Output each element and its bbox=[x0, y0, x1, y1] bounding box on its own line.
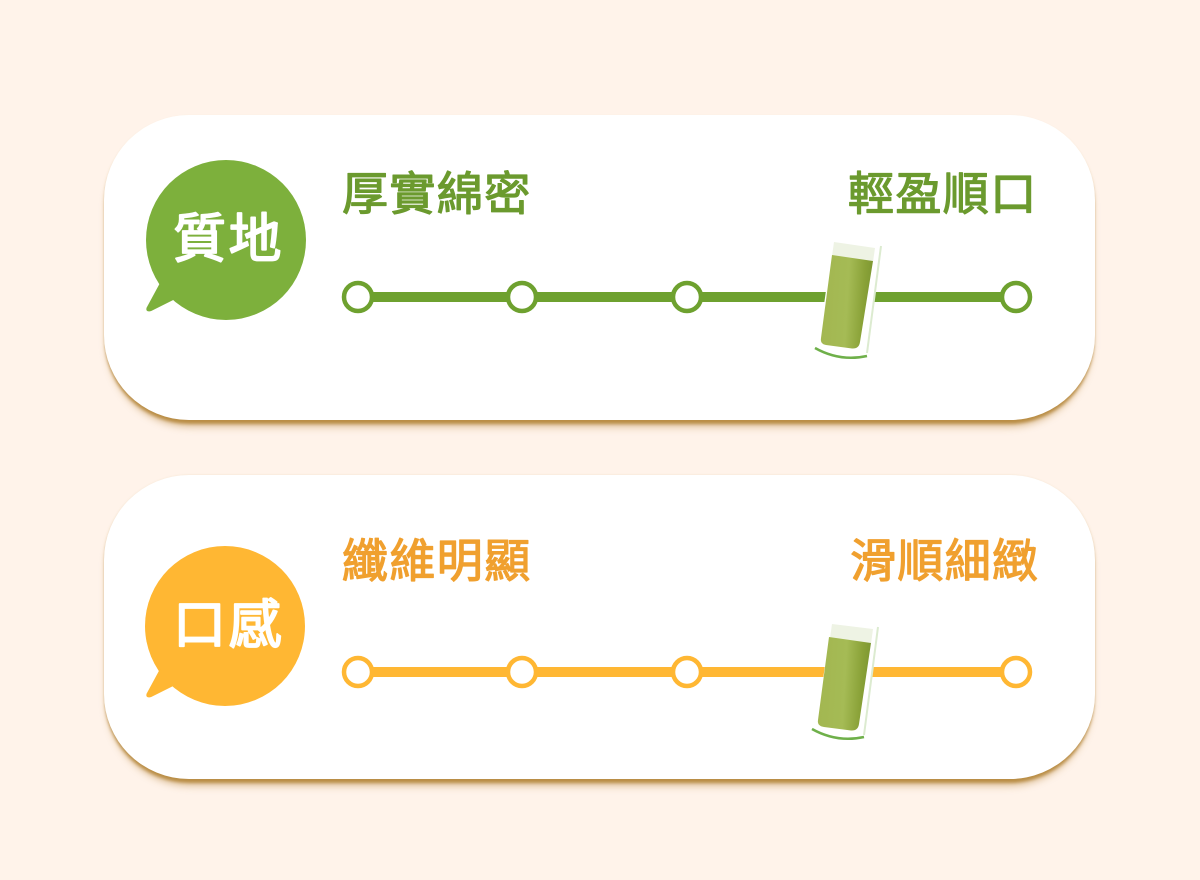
left label: mouthfeel: 纖維明顯 bbox=[342, 535, 532, 587]
scale track: texture bbox=[344, 283, 1030, 311]
right label: mouthfeel: 滑順細緻 bbox=[850, 535, 1040, 587]
right label: texture: 輕盈順口 bbox=[848, 168, 1038, 220]
panel shadow: texture bbox=[105, 118, 1094, 428]
panel card: texture bbox=[104, 115, 1095, 420]
speech bubble: texture bbox=[146, 160, 306, 320]
icon: juice glass marker, mouthfeel bbox=[812, 623, 878, 739]
speech bubble: mouthfeel bbox=[145, 546, 305, 706]
speech bubble: mouthfeel: 口感 bbox=[173, 596, 284, 655]
panel card: mouthfeel bbox=[104, 475, 1095, 779]
panel: mouthfeel bbox=[104, 475, 1095, 787]
scale track: mouthfeel bbox=[344, 658, 1030, 686]
panel: texture bbox=[104, 115, 1095, 428]
panel shadow: mouthfeel bbox=[105, 477, 1094, 787]
icon: juice glass marker, texture bbox=[815, 241, 881, 358]
left label: texture: 厚實綿密 bbox=[342, 168, 532, 220]
speech bubble: texture: 質地 bbox=[173, 210, 284, 269]
